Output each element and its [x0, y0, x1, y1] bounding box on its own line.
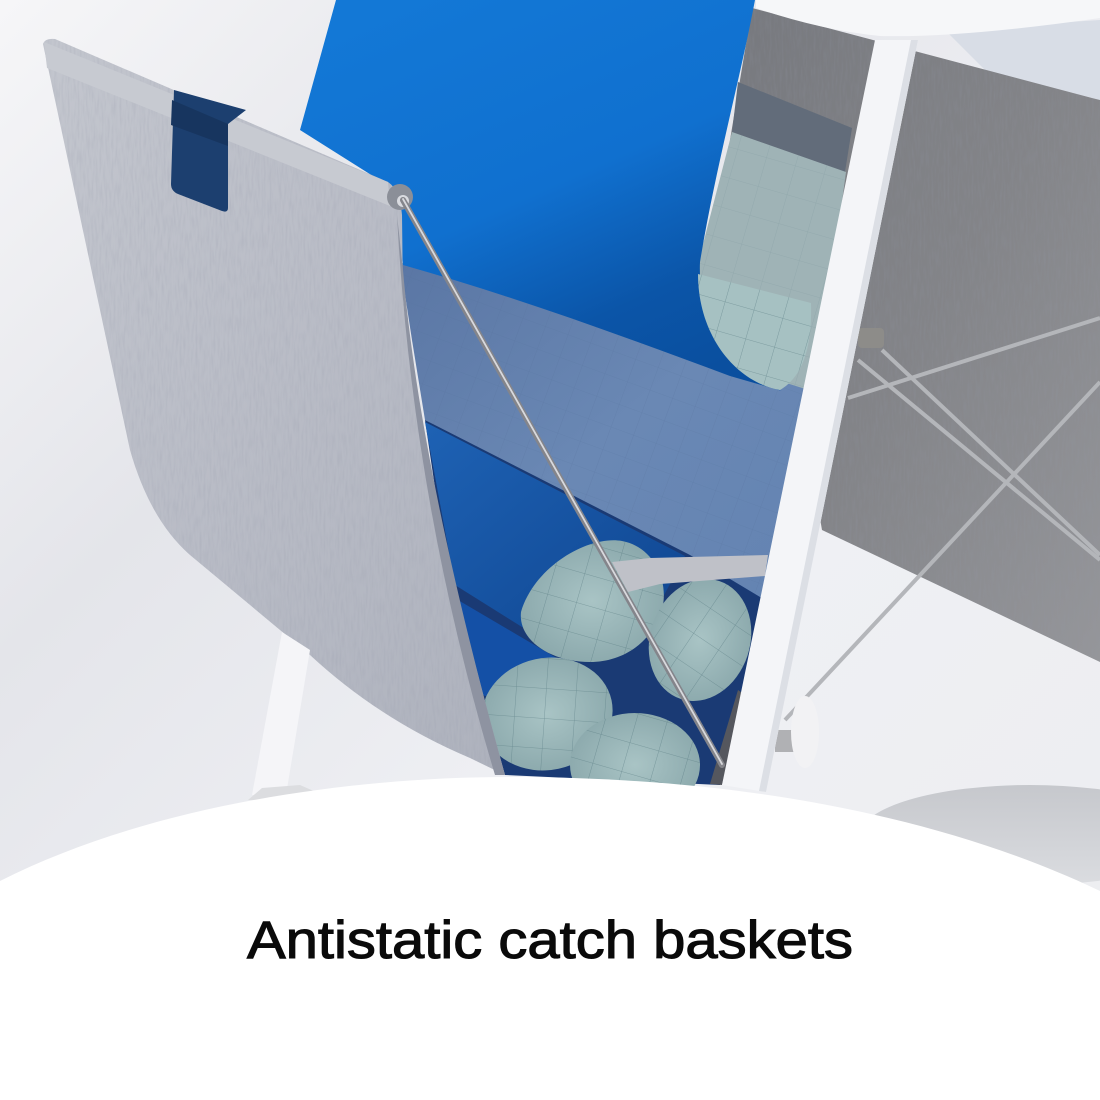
- rolled sheet: lower left blue: [458, 600, 560, 700]
- bracket connecting rod and leg: [612, 555, 768, 592]
- back basket paper sheet: [695, 132, 846, 400]
- dark basket interior: [425, 420, 765, 785]
- chrome cross rods: right: [785, 318, 1100, 720]
- front basket top hem: [44, 42, 390, 206]
- fabric inner edge: [397, 215, 505, 775]
- chrome support rod: front: [403, 199, 722, 765]
- rolled sheet: right: [633, 566, 767, 714]
- rolled sheet: upper large blue: [425, 422, 685, 662]
- floor shadow: [860, 785, 1100, 885]
- rolled sheet: lower left: [471, 646, 623, 782]
- back catch basket: [730, 8, 1100, 662]
- caster foot left: [248, 785, 316, 802]
- navy leather tab: [171, 90, 246, 212]
- white chair leg: left: [252, 632, 310, 795]
- chair leg shading: [759, 40, 918, 792]
- white chair leg: right: [722, 40, 918, 792]
- caster wheel right: [775, 696, 819, 768]
- far chair frame glimpse: [945, 20, 1100, 100]
- curled paper underside: [698, 274, 811, 390]
- far basket edge at bottom: [710, 690, 745, 785]
- front catch basket fabric: [43, 39, 505, 775]
- interior sheet with grid: [400, 262, 815, 610]
- white table top: [756, 0, 1100, 36]
- heading: Antistatic catch baskets: [247, 911, 853, 970]
- blue sheet hanging with curled end: [300, 0, 782, 391]
- rod mounting bolt: [858, 328, 884, 348]
- rolled sheet: bottom centre: [570, 713, 700, 817]
- basket pivot fitting: [387, 184, 413, 210]
- back basket hem: [732, 82, 852, 172]
- white curved panel: [0, 777, 1100, 1100]
